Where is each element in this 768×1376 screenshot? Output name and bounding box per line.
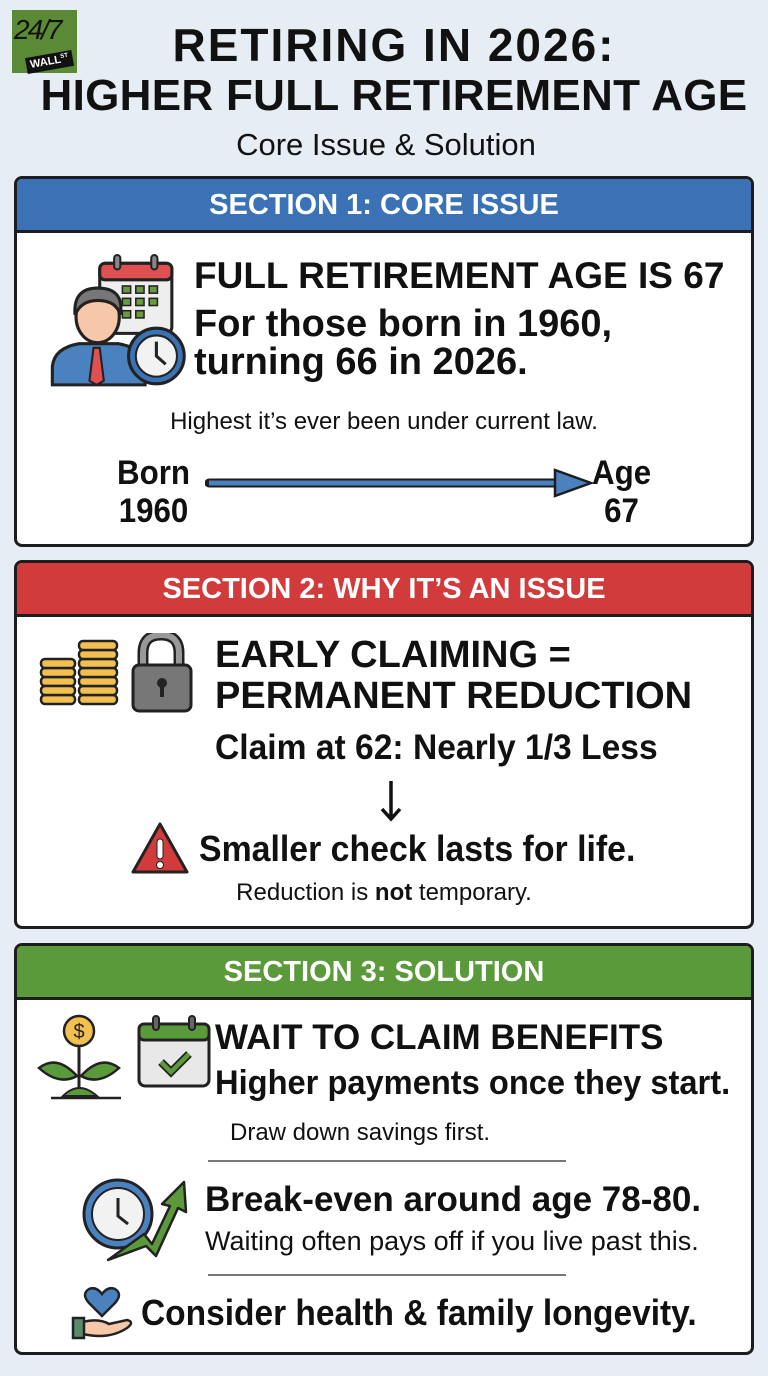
logo: WALLST [29,53,69,71]
text: draw down savings: Draw down savings first. [230,1119,490,1146]
title: RETIRING IN 2026: [172,19,616,71]
text: reduction is not temporary: Reduction is not temporary. [236,879,532,906]
panel: section 3 solution [14,943,754,1355]
text: born in 1960 turning 66 [194,303,612,383]
text: claim at 62: Claim at 62: Nearly 1/3 Less [215,728,658,767]
logo: 24/7 [14,14,60,45]
text: early claiming = permanent reduction: EARLY CLAIMING = [215,634,571,676]
heading: section 3 [17,946,751,1000]
label: age 67 [592,454,651,530]
text: born in 1960 turning 66: For those born in 1960, [194,303,612,345]
text: higher payments: Higher payments once they start. [215,1064,730,1102]
label: age 67: Age [592,454,651,492]
icon: money plant and calendar check [37,1014,210,1100]
icon: money plant and calendar check: $ [73,1021,85,1043]
label: born 1960: Born [117,454,190,492]
heading: section 1: SECTION 1: CORE ISSUE [209,189,559,221]
logo [12,10,77,73]
heading: section 2 [17,563,751,617]
arrow: born to age [205,468,594,498]
heading: section 3: SECTION 3: SOLUTION [224,956,544,988]
icon: hand with heart [72,1286,132,1340]
text: full retirement age is 67: FULL RETIREMENT AGE IS 67 [194,255,724,296]
label: born 1960 [117,454,190,530]
heading: section 1 [17,179,751,233]
subtitle: Core Issue & Solution [236,127,536,162]
icon: clock with rising arrow [82,1178,188,1262]
panel: section 1 core issue [14,176,754,547]
panel: section 2 why it's an issue [14,560,754,929]
text: smaller check lasts for life: Smaller check lasts for life. [199,828,635,869]
text: early claiming = permanent reduction: PERMANENT REDUCTION [215,675,692,717]
text: wait to claim benefits: WAIT TO CLAIM BENEFITS [215,1018,664,1057]
text: consider health: Consider health & family longevity. [141,1292,697,1333]
text: born in 1960 turning 66: turning 66 in 2026. [194,341,528,383]
heading: section 2: SECTION 2: WHY IT’S AN ISSUE [162,573,606,605]
text: waiting often pays off: Waiting often pays off if you live past this. [205,1226,699,1256]
text: break-even: Break-even around age 78-80. [205,1180,701,1219]
arrow: down [380,781,402,822]
icon: warning [132,822,189,874]
label: born 1960: 1960 [119,492,188,530]
icon: person with calendar and clock [50,254,186,386]
text: early claiming = permanent reduction [215,634,692,717]
icon: coins and lock [40,633,192,712]
label: age 67: 67 [604,492,639,530]
title line 2: HIGHER FULL RETIREMENT AGE [41,71,747,120]
text: highest ever: Highest it’s ever been under current law. [170,408,598,435]
